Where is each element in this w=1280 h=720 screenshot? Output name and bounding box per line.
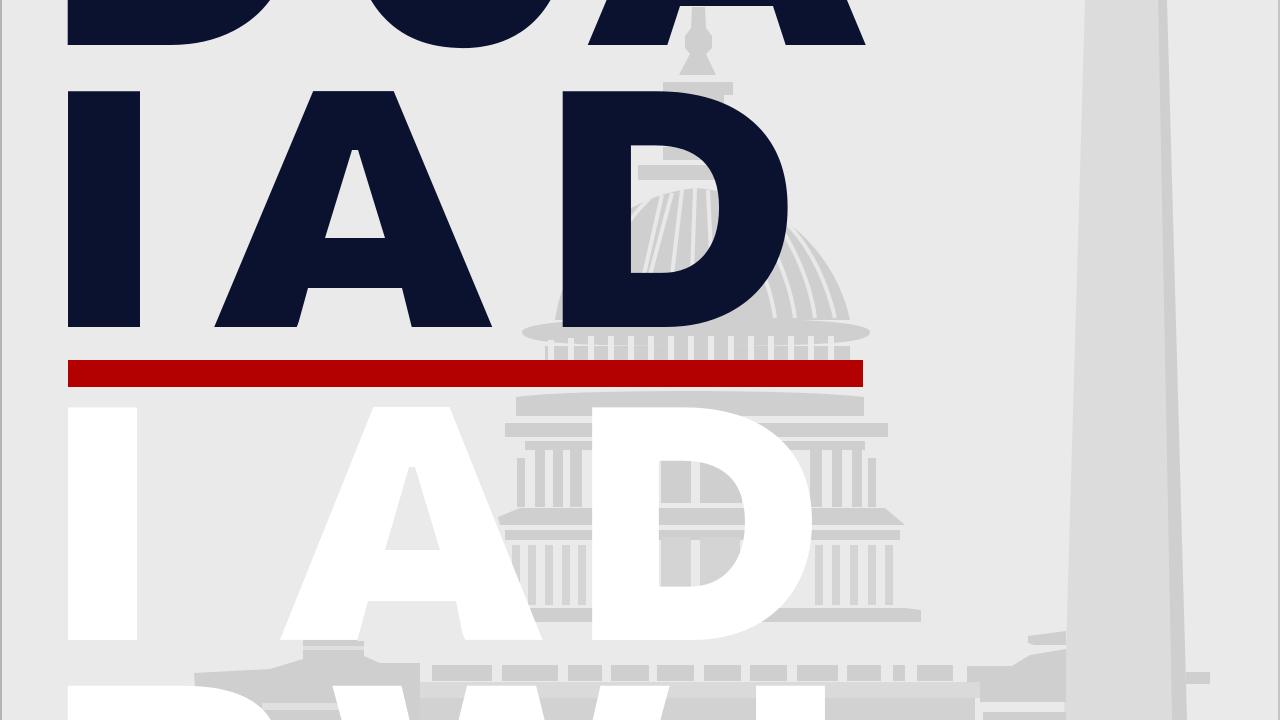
icon: Capitol statue <box>679 7 716 75</box>
icon: US Capitol silhouette <box>194 82 1066 720</box>
heading word: IAD navy: I <box>55 33 153 384</box>
red divider bar <box>68 360 863 387</box>
drum upper <box>516 391 864 416</box>
heading word: BWI white <box>55 627 837 720</box>
heading word: IAD navy <box>55 32 792 384</box>
heading word: IAD white: I <box>56 349 149 697</box>
icon: Washington Monument silhouette <box>1064 0 1210 720</box>
heading word: IAD navy: A <box>227 37 480 379</box>
dome <box>555 188 850 320</box>
right wing <box>1028 631 1066 645</box>
heading word: IAD white: A <box>292 355 531 692</box>
heading word: IAD white <box>56 349 816 697</box>
heading word: IAD navy: D <box>550 32 792 384</box>
left wing <box>194 640 420 720</box>
upper colonnade <box>522 318 870 346</box>
heading word: IAD white: D <box>580 349 816 697</box>
drum lower <box>498 508 905 525</box>
central building band <box>432 665 953 681</box>
heading word: DCA <box>55 0 854 103</box>
lantern <box>663 82 733 95</box>
